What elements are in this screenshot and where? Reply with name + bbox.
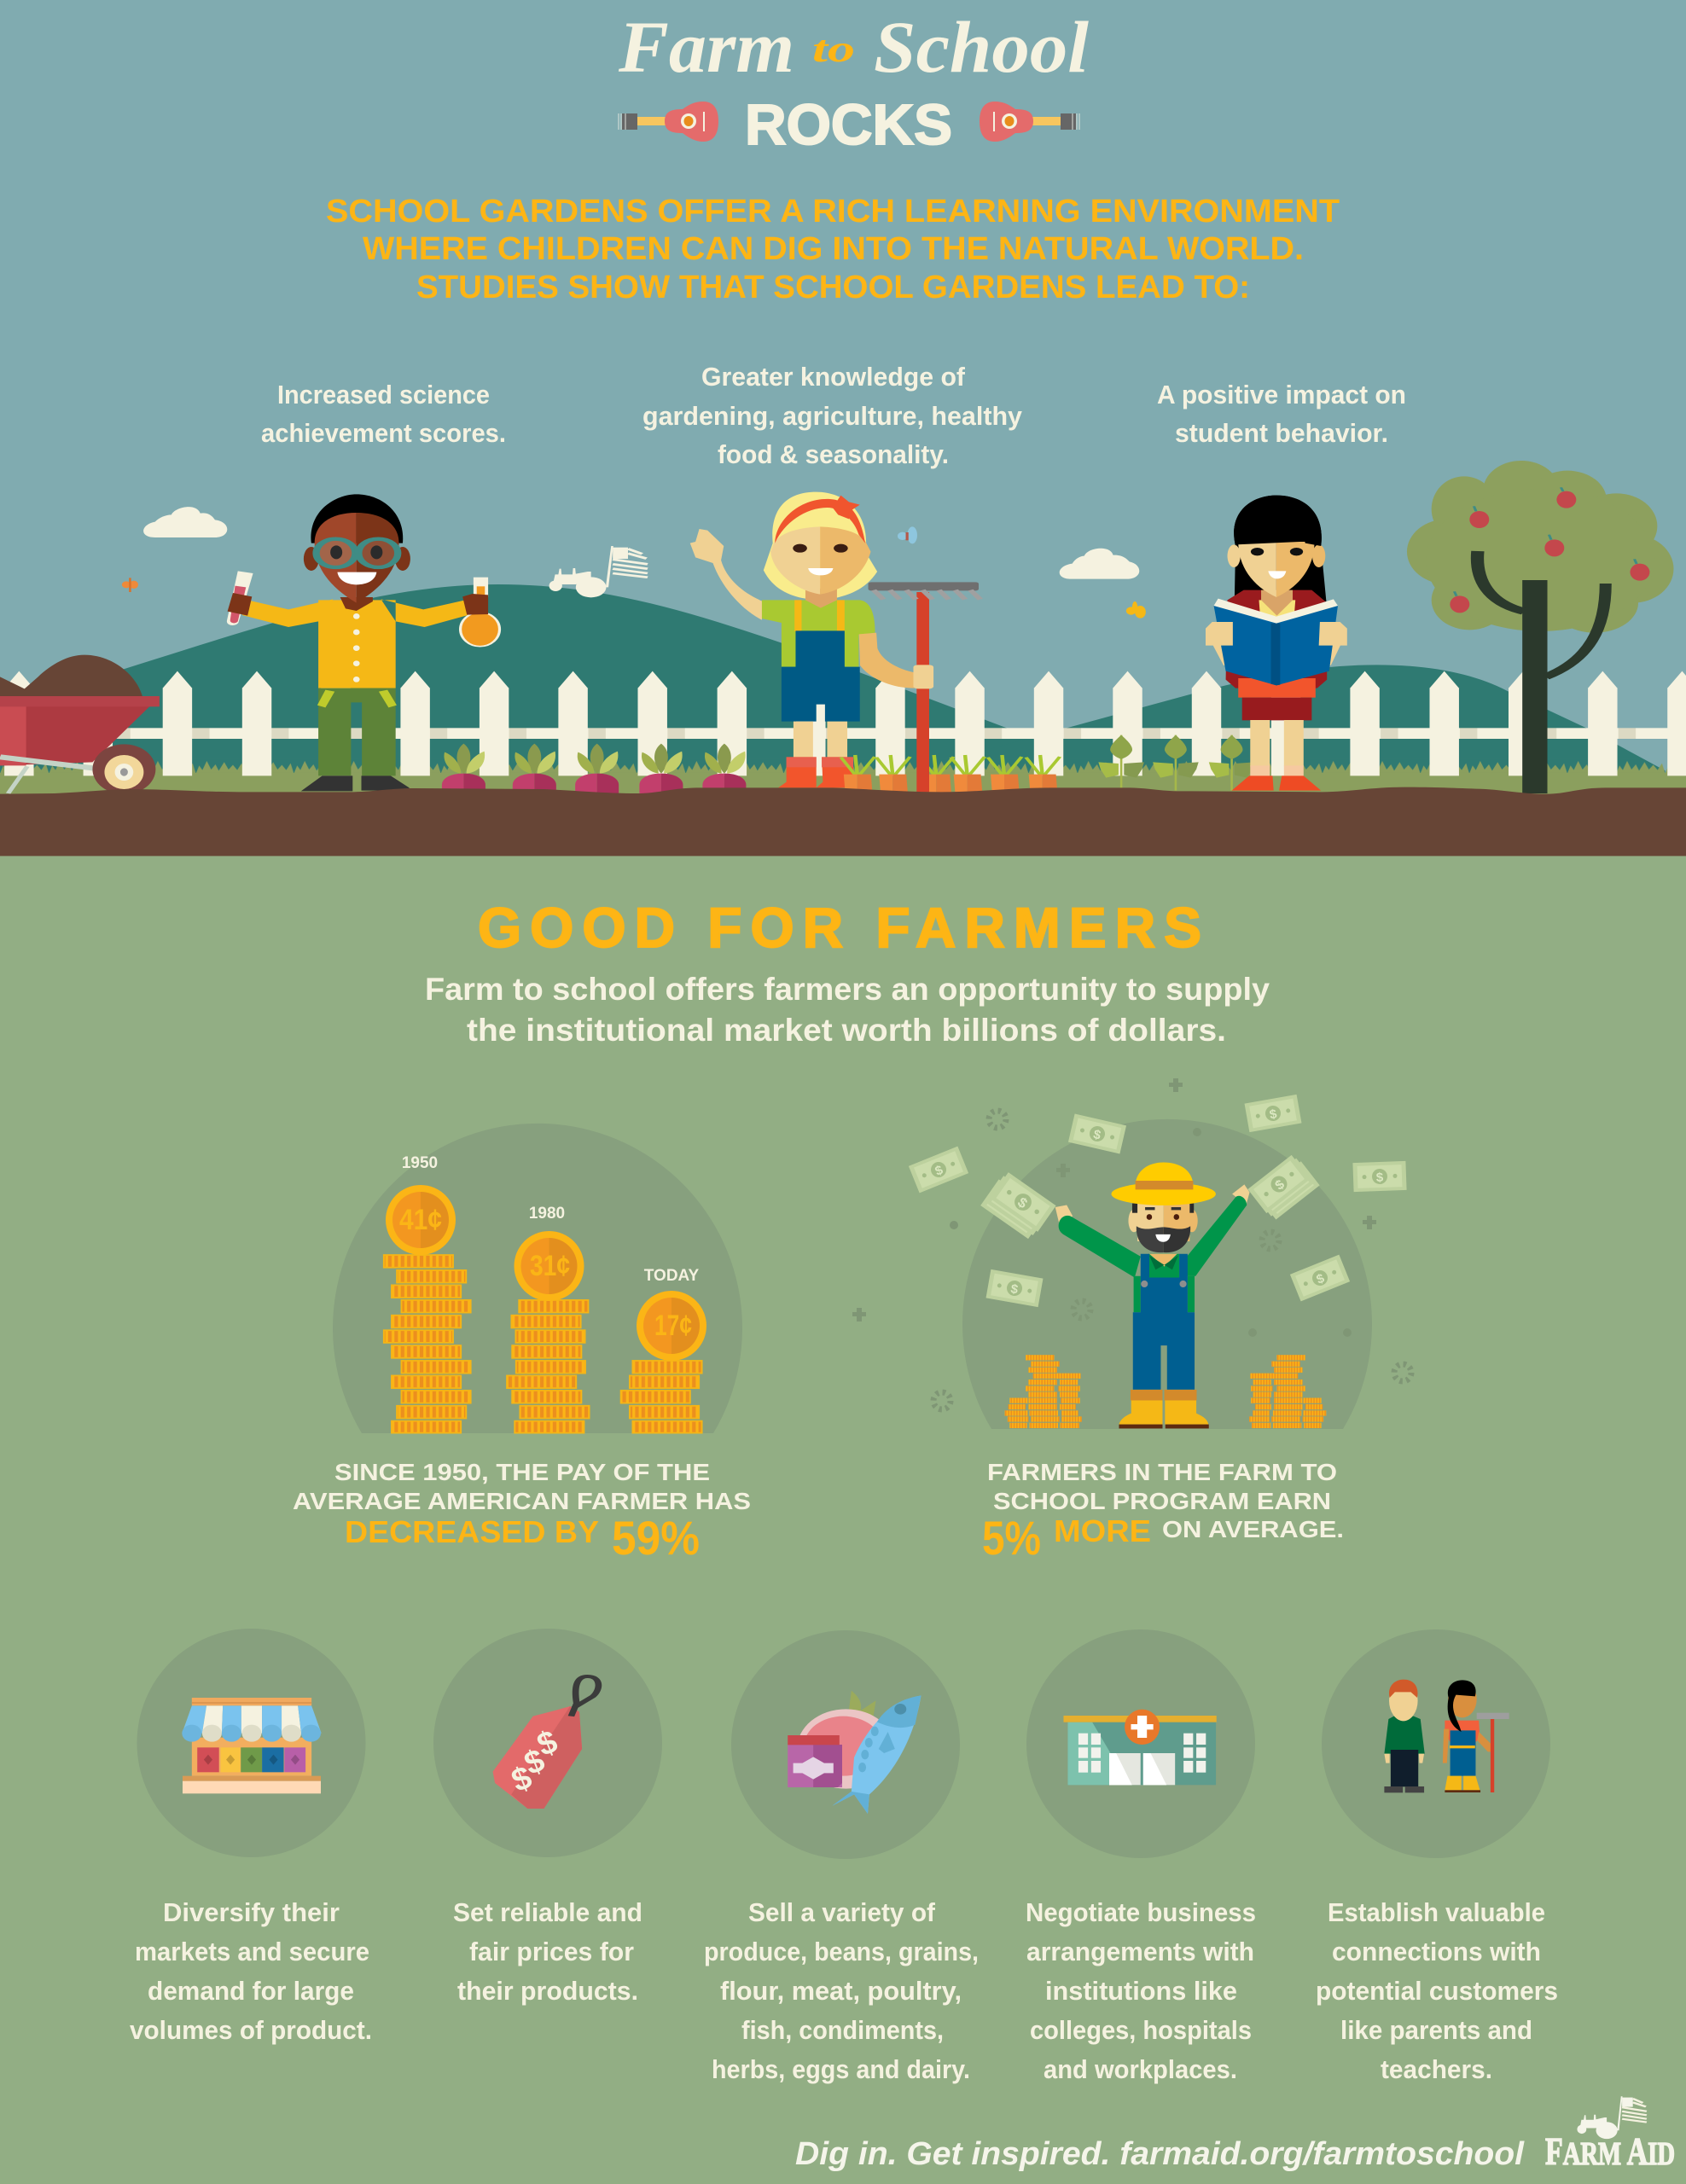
raised arm <box>690 529 763 620</box>
flying dollar bills: $ <box>1092 1127 1102 1143</box>
caption: negotiate business <box>1026 1897 1256 2084</box>
caption: sell a variety <box>704 1897 979 2084</box>
hands <box>228 593 488 616</box>
smile <box>337 572 376 584</box>
collar <box>1259 600 1295 617</box>
boots <box>778 757 817 787</box>
cloud left <box>143 507 227 537</box>
butterfly yellow <box>1126 601 1146 619</box>
overalls <box>1133 1254 1195 1390</box>
hair <box>1132 1204 1137 1213</box>
intro heading: WHERE CHILDREN CAN DIG INTO THE NATURAL WORLD. <box>363 231 1304 267</box>
Farm Aid logo <box>1545 2096 1675 2173</box>
butterfly orange <box>122 578 138 592</box>
legs <box>1250 720 1304 766</box>
legs <box>794 722 847 758</box>
year labels: 1980 <box>529 1205 565 1223</box>
benefit: science scores <box>261 380 506 448</box>
boots <box>1119 1400 1208 1425</box>
fence <box>0 671 1686 775</box>
title: Farm to School: Farm <box>618 6 794 88</box>
dollar signs on tag: $ <box>532 1723 562 1763</box>
buttons <box>353 613 360 682</box>
caption: reliable prices <box>453 1897 642 2006</box>
money fan right <box>1247 1153 1320 1222</box>
hands <box>1206 622 1347 646</box>
ears <box>1227 544 1241 567</box>
girl reading a book <box>1206 496 1347 791</box>
caption: diversify markets: Diversify their <box>163 1897 340 1927</box>
dollar signs on tag: $ <box>520 1742 549 1782</box>
benefit: science scores: achievement scores. <box>261 418 506 448</box>
hands <box>1055 1184 1250 1226</box>
caption: diversify markets: volumes of product. <box>130 2015 372 2045</box>
section intro text <box>425 972 1270 1048</box>
dollar signs on tag: $ <box>507 1759 537 1799</box>
coin 31 cents <box>514 1231 584 1301</box>
hat <box>1136 1162 1193 1184</box>
hair <box>311 494 403 543</box>
girl waving with rake <box>690 492 877 787</box>
money fan left <box>980 1170 1056 1241</box>
caption: 5% more <box>982 1459 1344 1565</box>
face <box>1137 1204 1164 1241</box>
ears <box>1128 1210 1140 1232</box>
caption: pay decreased: AVERAGE AMERICAN FARMER HAS <box>293 1488 751 1514</box>
coin 31 cents: 31¢ <box>530 1250 570 1282</box>
coin 41 cents: 41¢ <box>399 1204 442 1236</box>
caption: 5% more: MORE <box>1054 1513 1151 1548</box>
right coin pile <box>1249 1355 1326 1428</box>
intro heading: SCHOOL GARDENS OFFER A RICH LEARNING ENVIRONMENT <box>326 194 1340 229</box>
caption: diversify markets <box>130 1897 372 2045</box>
caption: negotiate business: colleges, hospitals <box>1030 2015 1252 2045</box>
caption: 5% more: SCHOOL PROGRAM EARN <box>993 1488 1331 1514</box>
caption: sell a variety: fish, condiments, <box>741 2015 944 2045</box>
section intro text: Farm to school offers farmers an opportunity to supply <box>425 972 1270 1007</box>
intro heading: STUDIES SHOW THAT SCHOOL GARDENS LEAD TO: <box>416 270 1250 305</box>
face <box>770 526 820 595</box>
benefit: greater knowledge: food & seasonality. <box>718 439 949 469</box>
overalls <box>782 630 860 722</box>
smile <box>1268 571 1286 578</box>
caption: diversify markets: demand for large <box>148 1976 354 2006</box>
caption: diversify markets: markets and secure <box>135 1937 369 1966</box>
caption: negotiate business: Negotiate business <box>1026 1897 1256 1927</box>
eyebrows and eyes <box>1145 1207 1181 1210</box>
beard <box>1137 1226 1164 1252</box>
farmer <box>1055 1162 1250 1428</box>
trunk and branches <box>1477 551 1606 793</box>
hair back <box>764 492 877 599</box>
caption: valuable connections: like parents and <box>1340 2015 1532 2045</box>
neck <box>805 589 837 608</box>
hills <box>0 584 1666 776</box>
caption: sell a variety: produce, beans, grains, <box>704 1937 979 1966</box>
apples <box>1450 487 1649 613</box>
section intro text: the institutional market worth billions of dollars. <box>467 1013 1226 1048</box>
caption: pay decreased: SINCE 1950, THE PAY OF THE <box>334 1459 710 1485</box>
wheelbarrow <box>0 655 160 794</box>
bandana <box>775 499 865 543</box>
smile <box>1155 1234 1171 1242</box>
overall suspenders <box>794 600 845 631</box>
caption: valuable connections: Establish valuable <box>1328 1897 1545 1927</box>
carrots <box>841 755 1060 795</box>
arms <box>1059 1196 1247 1278</box>
section heading: Good for Farmers: GOOD FOR FARMERS <box>478 896 1210 959</box>
icon: meat, jar and fish <box>788 1691 921 1814</box>
money fan right: $ <box>1272 1177 1288 1194</box>
backpack <box>1226 590 1327 688</box>
caption: pay decreased: DECREASED BY <box>345 1514 599 1549</box>
shoes <box>301 775 410 791</box>
glasses <box>317 539 398 567</box>
dome background <box>962 1119 1372 1429</box>
caption: sell a variety: Sell a variety of <box>748 1897 936 1927</box>
bangs <box>1234 496 1322 546</box>
grass <box>0 759 1686 799</box>
caption: reliable prices: their products. <box>457 1976 638 2006</box>
shirt <box>1134 1254 1195 1312</box>
coin 17 cents: 17¢ <box>654 1310 692 1342</box>
caption: negotiate business: and workplaces. <box>1044 2054 1237 2084</box>
caption: 5% more: ON AVERAGE. <box>1162 1516 1344 1542</box>
benefit: greater knowledge: Greater knowledge of <box>701 362 966 392</box>
cloud right <box>1060 549 1139 579</box>
title: Farm to School: to <box>812 28 855 70</box>
long hair <box>1234 496 1327 603</box>
title: Farm to School <box>618 6 1089 88</box>
caption: valuable connections: potential customers <box>1316 1976 1558 2006</box>
icon: man and woman with rake <box>1384 1680 1509 1792</box>
woman <box>1443 1680 1509 1792</box>
footer link text: Dig in. Get inspired. farmaid.org/farmtoschool <box>795 2136 1525 2172</box>
caption: valuable connections <box>1316 1897 1558 2084</box>
caption: sell a variety: flour, meat, poultry, <box>720 1976 962 2006</box>
title: Farm to School: School <box>874 6 1089 88</box>
arms <box>1206 623 1347 665</box>
panel: farmer earning more <box>852 1078 1411 1429</box>
caption: valuable connections: teachers. <box>1381 2054 1492 2084</box>
test tube <box>227 571 253 625</box>
eyes <box>793 544 807 553</box>
apple tree <box>1407 461 1673 793</box>
smile <box>808 568 833 575</box>
benefit: greater knowledge: gardening, agriculture, healthy <box>642 401 1023 431</box>
caption: negotiate business: institutions like <box>1045 1976 1237 2006</box>
panel: farmer pay coin stacks <box>333 1124 742 1433</box>
neck <box>340 597 373 611</box>
shirt and arms <box>242 599 468 688</box>
flask <box>461 578 500 647</box>
dome background <box>333 1124 742 1433</box>
caption: 5% more: 5% <box>982 1511 1041 1565</box>
ears <box>304 547 319 571</box>
benefit: student behavior <box>1157 380 1406 448</box>
caption: 5% more: FARMERS IN THE FARM TO <box>987 1459 1337 1485</box>
caption: reliable prices: fair prices for <box>469 1937 634 1966</box>
caption: sell a variety: herbs, eggs and dairy. <box>712 2054 970 2084</box>
book <box>1214 599 1338 685</box>
benefit: science scores: Increased science <box>277 380 490 410</box>
butterfly blue <box>898 526 917 543</box>
flying dollar bills: $ <box>1009 1281 1020 1298</box>
beets <box>442 744 746 795</box>
garden scene <box>0 461 1686 856</box>
logo tractor and flag <box>1577 2096 1647 2139</box>
year labels: 1950 <box>402 1154 438 1172</box>
neck <box>1261 590 1293 616</box>
tractor and flag on hill <box>549 546 648 597</box>
year labels <box>402 1154 700 1285</box>
icon: market stall <box>182 1698 322 1793</box>
icon: right guitar <box>980 102 1079 142</box>
coin 17 cents <box>637 1291 706 1361</box>
face <box>1238 542 1276 597</box>
sky background <box>0 0 1686 857</box>
rake <box>869 582 980 792</box>
logo wordmark: FARM AID <box>1545 2130 1675 2173</box>
green background <box>0 856 1686 2184</box>
flying dollar bills <box>909 1095 1407 1307</box>
skirt and shirt <box>1238 678 1316 698</box>
hand on rake <box>913 665 933 688</box>
flying dollar bills: $ <box>1269 1107 1278 1123</box>
icon circles row 1-3 backgrounds <box>137 1629 1550 1859</box>
pants <box>318 688 396 775</box>
right arm of waving girl <box>859 633 915 688</box>
flying dollar bills: $ <box>933 1163 945 1179</box>
shirt <box>762 600 875 667</box>
coin stacks <box>384 1255 702 1433</box>
seedlings <box>1098 735 1254 791</box>
caption: valuable connections: connections with <box>1332 1937 1541 1966</box>
caption: negotiate business: arrangements with <box>1026 1937 1254 1966</box>
title: Rocks with guitars <box>619 93 1079 157</box>
intro heading <box>326 194 1340 305</box>
flying dollar bills: $ <box>1376 1170 1384 1185</box>
benefit: greater knowledge <box>642 362 1023 469</box>
caption: pay decreased: 59% <box>612 1511 700 1565</box>
shoes <box>1232 775 1321 791</box>
title: Rocks with guitars: ROCKS <box>745 93 952 157</box>
icon: price tag <box>493 1676 598 1809</box>
dollar signs on tag <box>507 1723 562 1799</box>
caption: reliable prices: Set reliable and <box>453 1897 642 1927</box>
foliage <box>1407 461 1673 633</box>
icon: left guitar <box>619 102 718 142</box>
boy with test tube and flask <box>227 494 500 791</box>
man <box>1384 1680 1425 1792</box>
eyes <box>1251 548 1264 555</box>
coin 41 cents <box>386 1185 456 1255</box>
icon: hospital building <box>1063 1710 1217 1785</box>
coin piles and farmer <box>1005 1162 1326 1428</box>
face <box>315 513 357 603</box>
year labels: TODAY <box>644 1267 700 1285</box>
caption: pay decreased <box>293 1459 751 1565</box>
money fan left: $ <box>1015 1194 1030 1211</box>
left coin pile <box>1005 1355 1082 1428</box>
benefit: student behavior: A positive impact on <box>1157 380 1406 410</box>
soil <box>0 787 1686 856</box>
decorative sparks <box>933 1111 1411 1409</box>
benefit: student behavior: student behavior. <box>1175 418 1388 448</box>
flying dollar bills: $ <box>1315 1271 1327 1287</box>
